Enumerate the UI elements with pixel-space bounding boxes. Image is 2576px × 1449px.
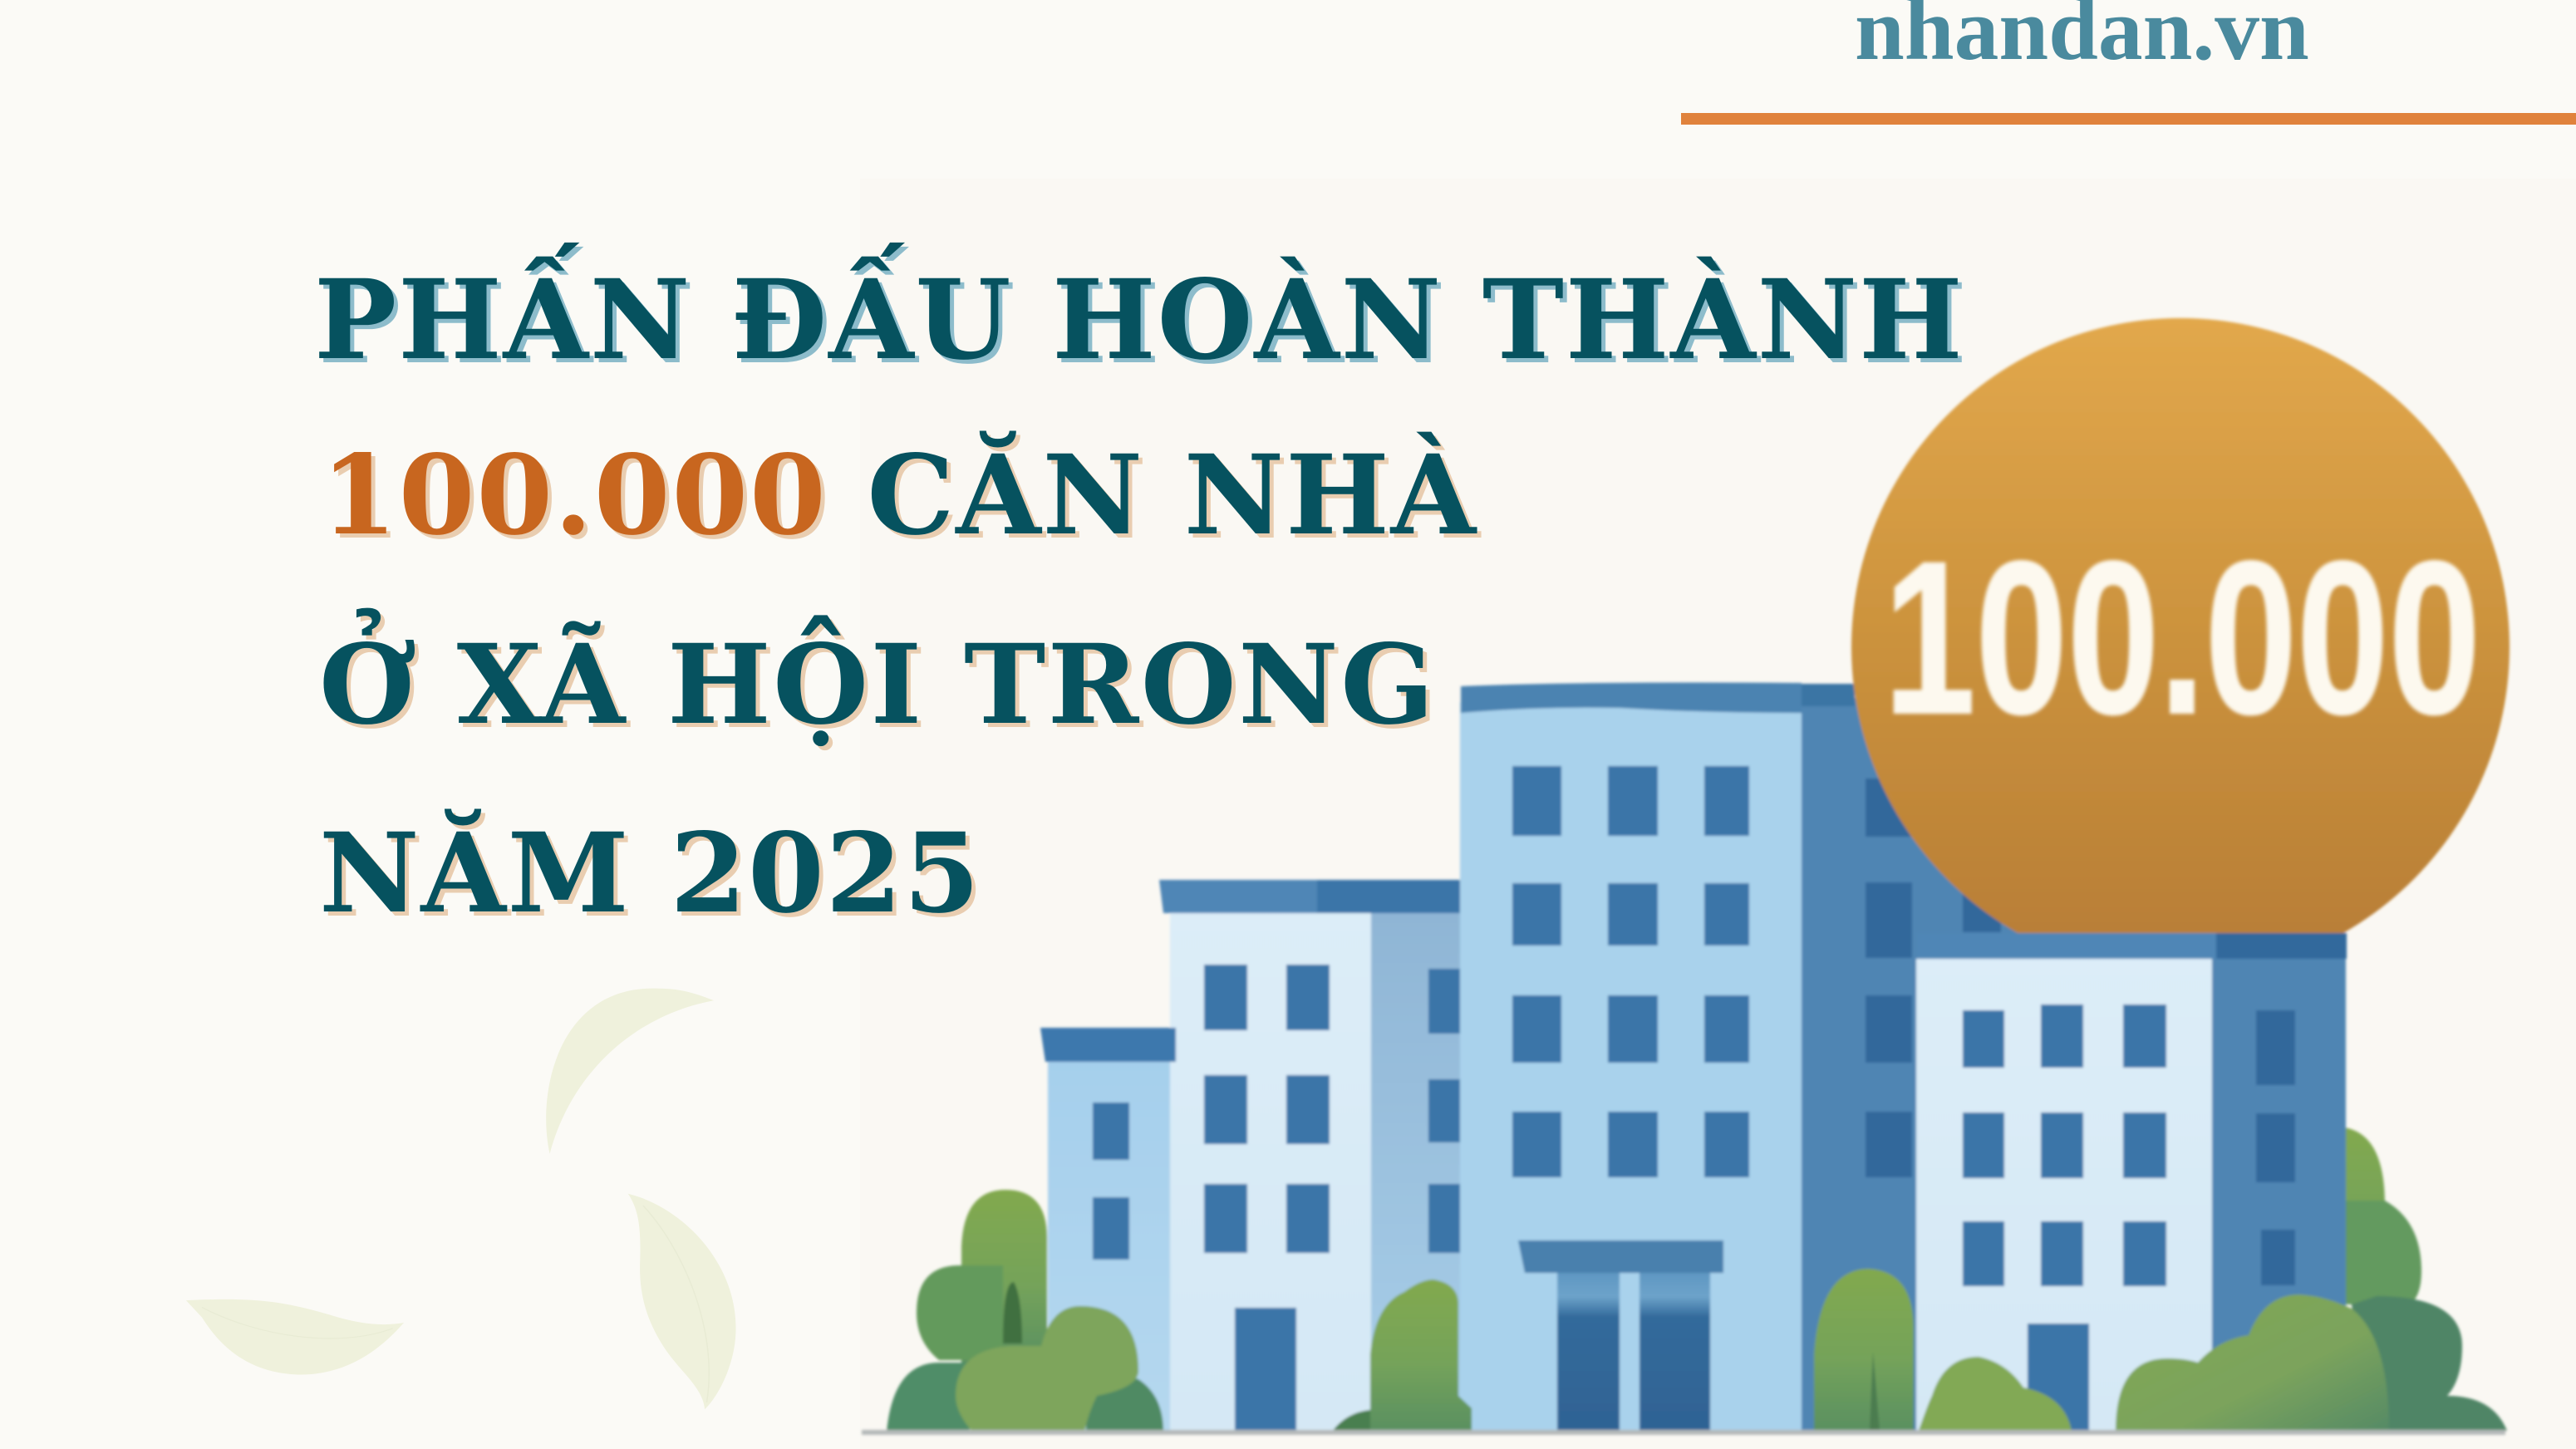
leaf: right bbox=[628, 1194, 736, 1409]
tree: centre-right bbox=[1814, 1269, 1914, 1431]
ground line bbox=[862, 1430, 2505, 1435]
tree: centre-left bbox=[1332, 1280, 1472, 1432]
apartment buildings illustration bbox=[862, 318, 2510, 1435]
image panel background bbox=[860, 179, 2576, 1449]
building: second from left bbox=[1159, 880, 1460, 1432]
building: right bbox=[1916, 933, 2347, 1432]
orange header rule bbox=[1681, 113, 2576, 125]
tree cluster: right bbox=[2116, 1294, 2389, 1431]
title: NĂM 2025 bbox=[319, 809, 981, 938]
leaf: left bbox=[186, 1299, 404, 1375]
building: centre tower bbox=[1460, 683, 2026, 1431]
bush: beside right door bbox=[1919, 1357, 2072, 1431]
title: Ở XÃ HỘI TRONG bbox=[319, 621, 1436, 749]
leaf: top bbox=[546, 989, 714, 1154]
gold circle 100.000 bbox=[1851, 318, 2510, 933]
entrance doors bbox=[1557, 1273, 1710, 1431]
title: 100.000 CĂN NHÀ bbox=[321, 431, 1477, 560]
title: PHẤN ĐẤU HOÀN THÀNH bbox=[314, 256, 1964, 385]
building: far left bbox=[1040, 1028, 1176, 1430]
entrance canopy bbox=[1518, 1240, 1723, 1273]
tree cluster: left bbox=[887, 1190, 1163, 1432]
title bbox=[314, 243, 1964, 938]
decorative leaves bbox=[186, 989, 736, 1409]
trees behind right building bbox=[2344, 1127, 2507, 1431]
